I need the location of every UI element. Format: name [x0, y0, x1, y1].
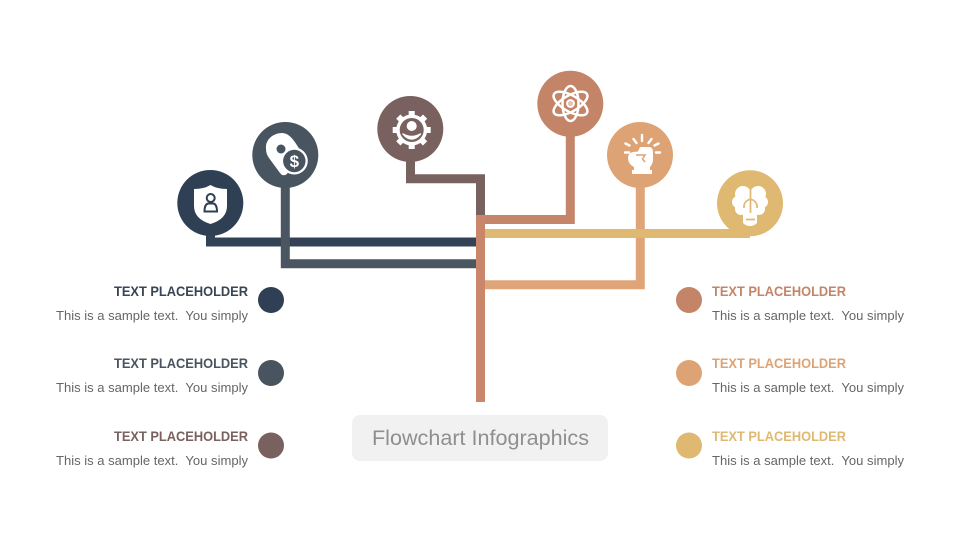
legend item: right 1: This is a sample text. You simply: [712, 308, 904, 323]
icon: brain lightbulb: [717, 170, 783, 236]
connector: pin to trunk: [285, 175, 478, 264]
icon: gear with person: [377, 96, 443, 162]
icon: location pin with dollar: $: [290, 152, 300, 171]
icon: shield person: [177, 170, 243, 236]
legend item: right 1: [676, 283, 904, 323]
legend item: left 1: TEXT PLACEHOLDER: [114, 283, 248, 299]
legend item: right 1: TEXT PLACEHOLDER: [712, 283, 846, 299]
icon: location pin with dollar: [252, 122, 318, 188]
connector: shield to trunk: [210, 225, 478, 242]
legend item: left 3: This is a sample text. You simply: [56, 453, 248, 468]
connector: main trunk: [476, 215, 485, 402]
title: Flowchart Infographics: [372, 427, 589, 450]
legend item: right 3: TEXT PLACEHOLDER: [712, 428, 846, 444]
legend item: left 3: TEXT PLACEHOLDER: [114, 428, 248, 444]
connector: brain to trunk: [485, 229, 750, 238]
legend item: left 2: This is a sample text. You simply: [56, 380, 248, 395]
icon: raised fist: [607, 122, 673, 188]
legend item: left 1: This is a sample text. You simply: [56, 308, 248, 323]
connector: gear to trunk: [410, 150, 480, 220]
legend item: right 2: [676, 355, 904, 395]
legend item: left 1: [56, 283, 284, 323]
connector: fist to trunk: [480, 175, 640, 285]
legend item: left 2: [56, 355, 284, 395]
title: [352, 415, 608, 461]
legend item: right 3: This is a sample text. You simply: [712, 453, 904, 468]
legend item: left 3: [56, 428, 284, 468]
legend item: right 2: This is a sample text. You simply: [712, 380, 904, 395]
legend item: right 3: [676, 428, 904, 468]
connector: atom to trunk: [480, 125, 570, 220]
icon: atom: [537, 71, 603, 137]
legend item: right 2: TEXT PLACEHOLDER: [712, 355, 846, 371]
legend item: left 2: TEXT PLACEHOLDER: [114, 355, 248, 371]
